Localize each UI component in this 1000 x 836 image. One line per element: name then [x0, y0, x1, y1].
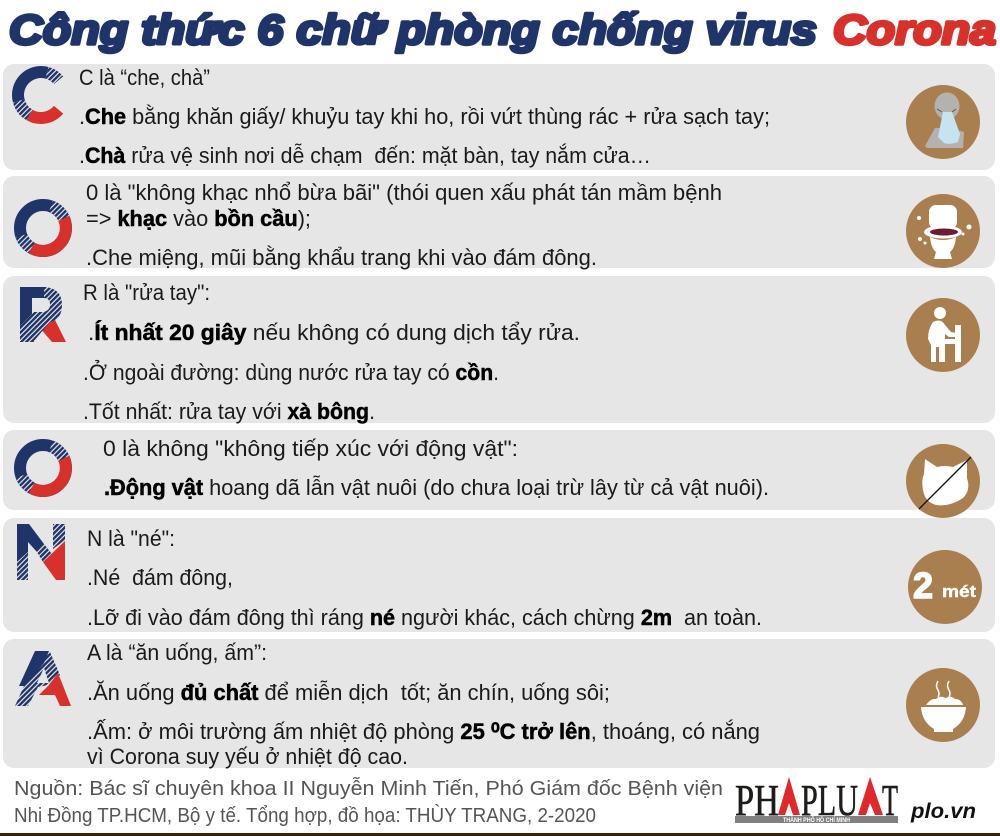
title: Corona [833, 6, 996, 53]
text: R [83, 280, 580, 424]
text: A: vì Corona suy yếu ở nhiệt độ cao. [87, 744, 408, 769]
title: Công thức 6 chữ phòng chống virus [9, 6, 817, 53]
icon: tissue [906, 85, 980, 159]
icon: 2 metres [908, 550, 982, 624]
text: R: R là "rửa tay": [83, 280, 210, 305]
panel: N [3, 518, 995, 632]
text: R: .Tốt nhất: rửa tay với xà bông. [83, 399, 375, 424]
icon: rice bowl [906, 668, 980, 742]
text: N: .Lỡ đi vào đám đông thì ráng né người khác, cách chừng 2m an toàn. [87, 605, 762, 630]
text: O [86, 180, 722, 270]
text: A: .Ấm: ở môi trường ấm nhiệt độ phòng 25 ⁰C trở lên, thoáng, có nắng [87, 719, 760, 744]
icon: toilet [906, 194, 980, 268]
panel: O [3, 176, 995, 270]
source note [14, 777, 723, 827]
text: O second: .Động vật hoang dã lẫn vật nuôi (do chưa loại trừ lây từ cả vật nuôi). [104, 475, 769, 500]
logo: Pháp Luật: T [882, 776, 898, 825]
text: R: .Ở ngoài đường: dùng nước rửa tay có cồn. [83, 360, 499, 385]
panel: R [3, 276, 995, 424]
logo: Pháp Luật: THÀNH PHỐ HỒ CHÍ MINH [783, 816, 850, 824]
panel: C [3, 64, 995, 170]
text: N: N là "né": [87, 526, 175, 551]
letter R [20, 287, 66, 342]
text: A: .Ăn uống đủ chất để miễn dịch tốt; ăn chín, uống sôi; [87, 680, 610, 705]
website: plo.vn [910, 800, 976, 823]
letter A [15, 651, 71, 706]
letter C [18, 72, 59, 118]
letter O [20, 445, 66, 491]
text: A: A là “ăn uống, ấm”: [87, 640, 267, 665]
panel: A [3, 639, 995, 769]
source note: Nguồn: Bác sĩ chuyên khoa II Nguyễn Minh Tiến, Phó Giám đốc Bệnh viện [14, 777, 723, 800]
text: N [87, 526, 762, 630]
text: C: .Chà rửa vệ sinh nơi dễ chạm đến: mặt bàn, tay nắm cửa… [79, 143, 651, 168]
text: C [79, 65, 770, 168]
icon: 2 metres: mét [942, 582, 976, 601]
icon: 2 metres: 2 [913, 565, 933, 606]
text: O: 0 là "không khạc nhổ bừa bãi" (thói quen xấu phát tán mầm bệnh [86, 180, 722, 205]
text: R: .Ít nhất 20 giây nếu không có dung dịch tẩy rửa. [88, 320, 580, 345]
source note: Nhi Đồng TP.HCM, Bộ y tế. Tổng hợp, đồ họa: THÙY TRANG, 2-2020 [14, 804, 596, 827]
panel: O second [3, 430, 995, 518]
logo: Pháp Luật [735, 776, 898, 825]
letter N [17, 524, 65, 580]
text: O second [103, 436, 769, 500]
logo: Pháp Luật: PH [735, 776, 779, 825]
logo: Pháp Luật: PLU [801, 776, 858, 825]
text: N: .Né đám đông, [87, 565, 233, 590]
text: O: .Che miệng, mũi bằng khẩu trang khi vào đám đông. [86, 245, 597, 270]
text: A [87, 640, 760, 769]
text: O: => khạc vào bồn cầu); [86, 206, 311, 231]
text: C: C là “che, chà” [79, 65, 210, 90]
icon: hand washing [906, 298, 980, 372]
letter O [20, 205, 66, 251]
text: O second: 0 là không "không tiếp xúc với động vật": [103, 436, 518, 461]
icon: no cat [906, 444, 980, 518]
text: C: .Che bằng khăn giấy/ khuỷu tay khi ho, rồi vứt thùng rác + rửa sạch tay; [79, 104, 770, 129]
